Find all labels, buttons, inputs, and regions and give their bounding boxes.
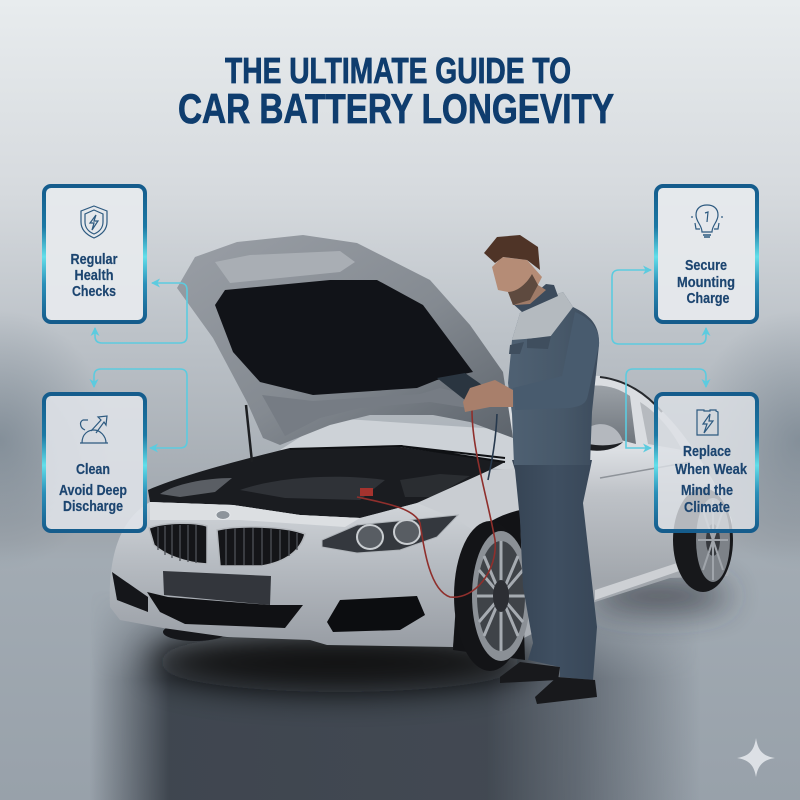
text <box>675 444 748 516</box>
tablet <box>437 373 488 408</box>
headlight <box>322 515 458 553</box>
text: Mounting <box>677 275 735 291</box>
text: Checks <box>72 284 116 300</box>
badge <box>216 510 230 520</box>
text: Discharge <box>63 499 123 515</box>
car front bumper <box>110 500 500 647</box>
legs <box>512 460 597 680</box>
text: Climate <box>684 500 730 516</box>
arm <box>513 312 599 410</box>
connector: bottom right <box>626 369 706 448</box>
connector: top right <box>612 270 706 344</box>
text: Avoid Deep <box>59 483 127 499</box>
front wheel <box>454 521 530 671</box>
chest pockets <box>509 336 551 354</box>
icon: battery <box>697 410 718 435</box>
connector: top left <box>95 283 187 343</box>
text: Clean <box>76 462 110 478</box>
text: Health <box>74 268 114 284</box>
text <box>677 258 735 307</box>
panel: clean avoid deep discharge <box>44 394 145 531</box>
hand <box>463 380 513 412</box>
mechanic <box>437 235 599 704</box>
face <box>492 257 542 305</box>
side windows <box>588 385 636 444</box>
icon: sparkle <box>737 738 775 777</box>
rear wheel <box>673 488 733 592</box>
light yoke <box>512 292 573 340</box>
door sill highlight <box>595 562 682 600</box>
text: Regular <box>70 252 118 268</box>
door mirror <box>588 424 623 451</box>
wheel arch <box>453 510 525 660</box>
text: When Weak <box>675 462 748 478</box>
text: Charge <box>686 291 730 307</box>
lower intake <box>147 592 303 628</box>
far tyre <box>163 623 227 641</box>
text: Mind the <box>681 483 733 499</box>
text <box>59 462 127 515</box>
hood closing panel <box>150 502 360 527</box>
text <box>70 252 118 300</box>
engine bay <box>148 447 505 518</box>
wall vignette <box>0 310 800 570</box>
licence plate <box>163 571 271 605</box>
text: Replace <box>683 444 731 460</box>
panel: replace when weak mind the climate <box>656 394 757 531</box>
shoes <box>500 662 560 683</box>
grille slats <box>158 525 297 565</box>
icon: shield <box>81 206 107 238</box>
left grille <box>149 523 207 564</box>
floor reflection and shadow <box>90 582 730 800</box>
title line 2: CAR BATTERY LONGEVITY <box>178 85 614 132</box>
hood strut <box>246 405 252 462</box>
wipers <box>290 446 505 462</box>
left intake <box>112 572 148 612</box>
windshield <box>280 418 515 470</box>
right grille <box>217 527 305 566</box>
title line 1: THE ULTIMATE GUIDE TO <box>225 50 571 91</box>
icon: arrow and dome <box>80 416 108 443</box>
icon: light bulb <box>692 205 722 237</box>
car side body <box>520 446 730 640</box>
connector: bottom left <box>94 369 187 448</box>
car <box>110 235 733 671</box>
neck <box>512 284 558 312</box>
cables <box>357 410 495 597</box>
torso <box>508 292 599 465</box>
panel: secure mounting charge <box>656 186 757 322</box>
open hood <box>177 235 513 445</box>
hood upper highlight <box>215 251 355 283</box>
car panel near wheel <box>417 468 520 533</box>
car roof and rear <box>500 376 732 610</box>
hood lower rib <box>262 388 470 436</box>
hair <box>484 235 540 270</box>
text: Secure <box>685 258 727 274</box>
right intake <box>327 596 425 632</box>
panel: regular health checks <box>44 186 145 322</box>
title <box>178 50 614 132</box>
battery clamp <box>360 488 373 496</box>
hood liner <box>215 280 473 395</box>
